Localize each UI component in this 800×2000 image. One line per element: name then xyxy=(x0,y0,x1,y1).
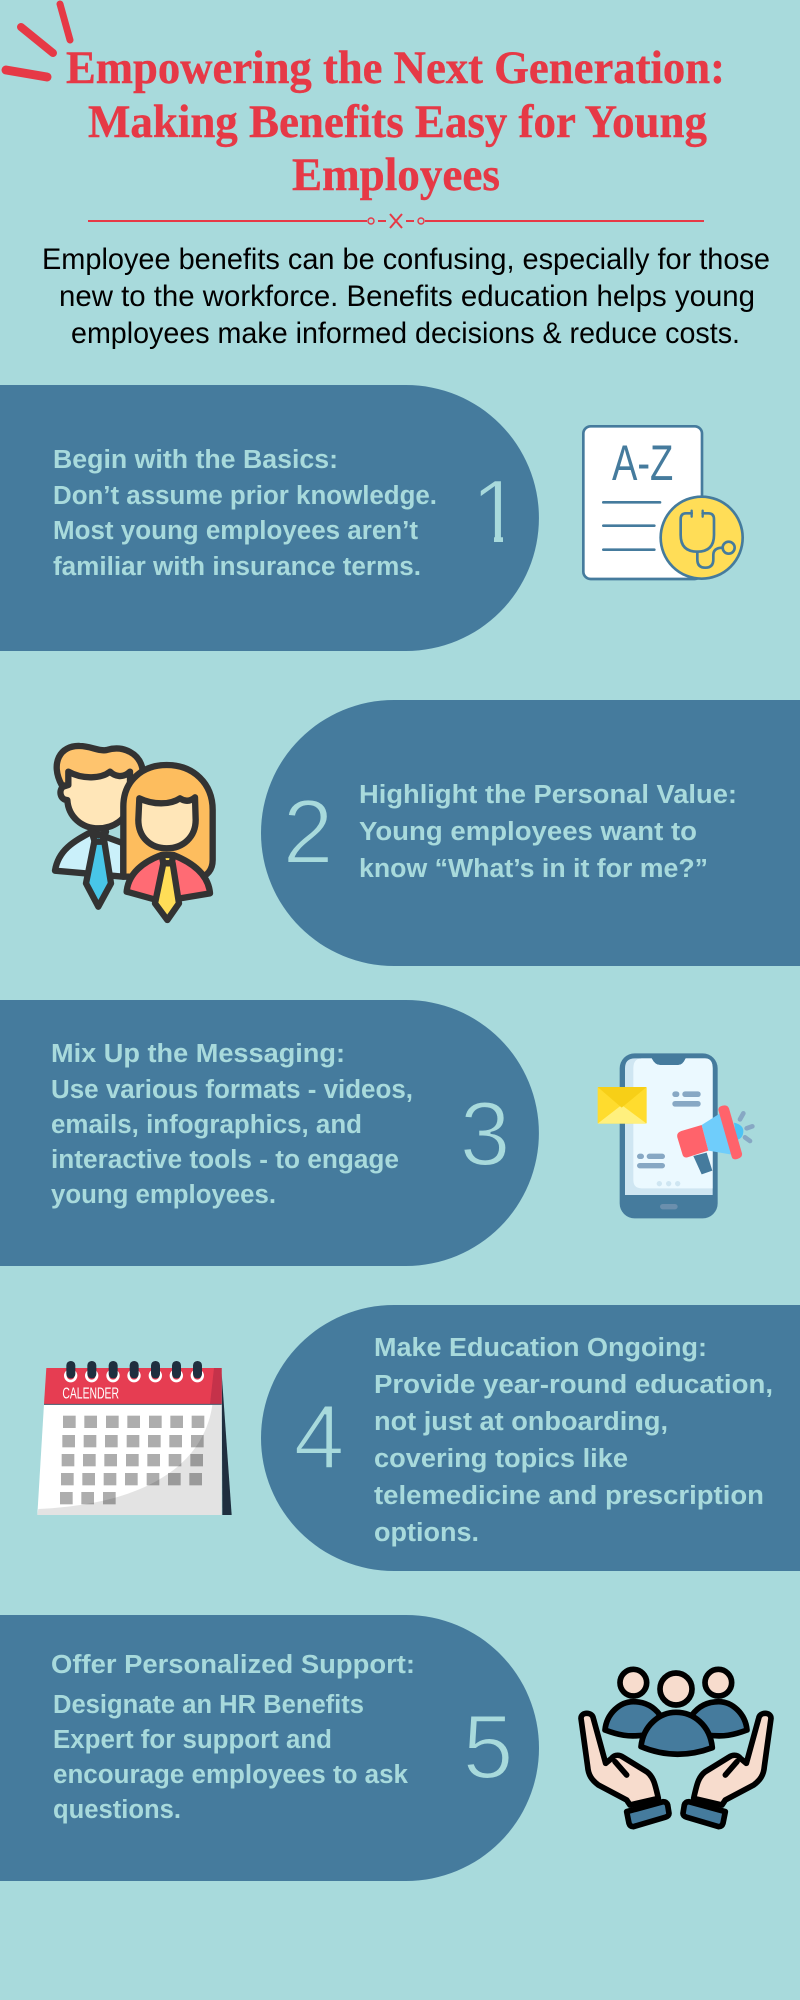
panel 2 text xyxy=(359,781,737,883)
panel 2 text: know “What’s in it for me?” xyxy=(359,855,708,883)
panel 1 text: Most young employees aren’t xyxy=(53,517,419,545)
panel 3 text xyxy=(51,1040,413,1209)
icon: A-Z glossary document with stethoscope xyxy=(583,426,743,579)
number 1: 1 xyxy=(471,462,522,563)
icon: A-Z glossary document with stethoscope: A-Z xyxy=(612,435,673,491)
panel 4 text: Provide year-round education, xyxy=(374,1371,773,1399)
panel 4 text: options. xyxy=(374,1519,479,1547)
panel 4 text: covering topics like xyxy=(374,1445,628,1473)
panel 4 text: not just at onboarding, xyxy=(374,1408,668,1436)
panel 2: highlight the personal value xyxy=(261,700,800,966)
panel 2 text: Young employees want to xyxy=(359,818,697,846)
panel 4 text: telemedicine and prescription xyxy=(374,1482,764,1510)
panel 5 text: Offer Personalized Support: xyxy=(51,1651,415,1679)
intro text xyxy=(42,243,770,350)
number 4: 4 xyxy=(294,1387,344,1488)
number 5: 5 xyxy=(463,1697,513,1798)
panel 4: make education ongoing xyxy=(261,1305,800,1571)
icon: desk calendar xyxy=(37,1361,232,1515)
panel 5: offer personalized support xyxy=(0,1615,539,1881)
panel 1 text: Don’t assume prior knowledge. xyxy=(53,482,437,510)
intro text: Employee benefits can be confusing, especially for those xyxy=(42,243,770,276)
icon: hands supporting a group of people xyxy=(581,1669,771,1827)
panel 3: mix up the messaging xyxy=(0,1000,539,1266)
panel 1 text: Begin with the Basics: xyxy=(53,446,338,474)
title divider with ornament xyxy=(88,214,704,228)
panel 5 text xyxy=(51,1651,415,1824)
icon: phone with envelope and megaphone xyxy=(598,1053,752,1218)
panel 3 text: Use various formats - videos, xyxy=(51,1076,413,1104)
panel 1: begin with the basics xyxy=(0,385,539,651)
icon: two young employees xyxy=(55,746,213,920)
panel 3 text: young employees. xyxy=(51,1181,276,1209)
decorative spark marks xyxy=(6,4,70,77)
icon: desk calendar: CALENDER xyxy=(62,1385,119,1402)
panel 4 text: Make Education Ongoing: xyxy=(374,1334,707,1362)
panel 4 text xyxy=(374,1334,773,1547)
panel 5 text: Expert for support and xyxy=(53,1726,332,1754)
panel 3 text: Mix Up the Messaging: xyxy=(51,1040,345,1068)
panel 5 text: encourage employees to ask xyxy=(53,1761,409,1789)
number 3: 3 xyxy=(460,1084,510,1185)
title: Empowering the Next Generation: xyxy=(66,42,725,94)
panel 2 text: Highlight the Personal Value: xyxy=(359,781,737,809)
number 2: 2 xyxy=(283,782,333,883)
title: Making Benefits Easy for Young xyxy=(88,96,707,148)
panel 3 text: emails, infographics, and xyxy=(51,1111,362,1139)
panel 1 text xyxy=(53,446,437,581)
intro text: employees make informed decisions & reduce costs. xyxy=(71,317,740,350)
title xyxy=(66,42,725,201)
title: Employees xyxy=(292,149,500,201)
panel 3 text: interactive tools - to engage xyxy=(51,1146,399,1174)
panel 5 text: questions. xyxy=(53,1796,181,1824)
panel 1 text: familiar with insurance terms. xyxy=(53,553,421,581)
panel 5 text: Designate an HR Benefits xyxy=(53,1691,364,1719)
intro text: new to the workforce. Benefits education helps young xyxy=(59,280,755,313)
